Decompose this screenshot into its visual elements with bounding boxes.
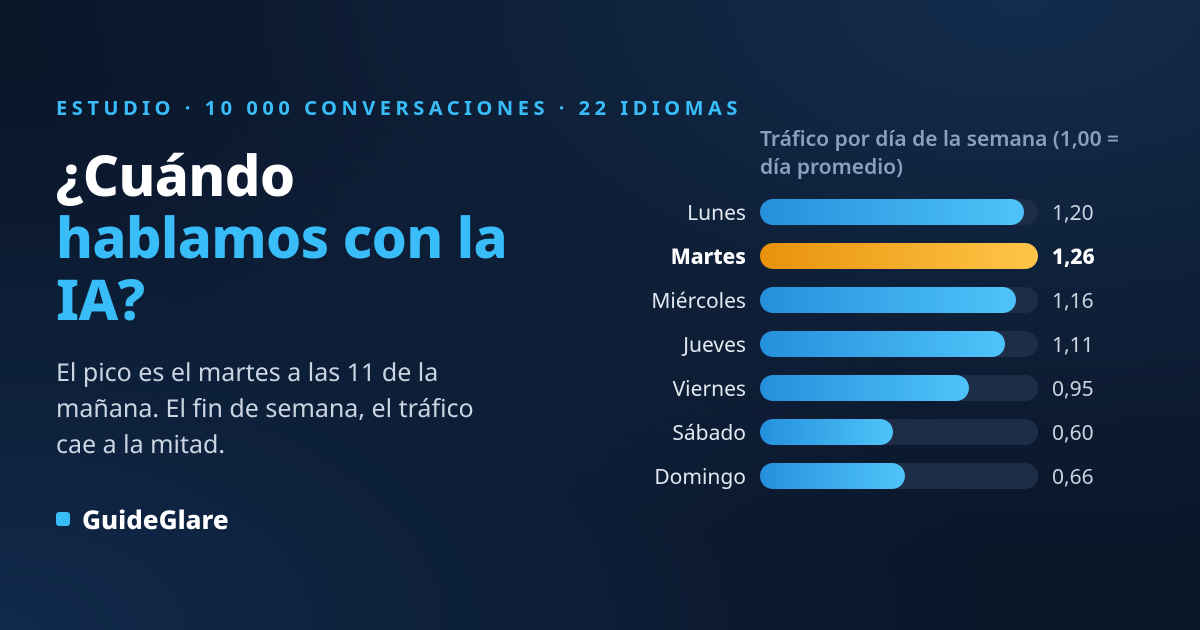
subtitle: cae a la mitad.	[56, 427, 225, 461]
row: Martes	[671, 243, 1095, 271]
chart heading: Tráfico por día de la semana (1,00 =	[760, 125, 1119, 153]
row: Lunes: 1,20	[1052, 199, 1094, 227]
row: Viernes	[672, 375, 1094, 403]
row: Lunes	[687, 199, 1094, 227]
row: Miércoles: Miércoles	[651, 287, 746, 315]
row: Viernes: 0,95	[1052, 375, 1094, 403]
row: Jueves: Jueves	[683, 331, 746, 359]
subtitle	[56, 355, 474, 461]
chart	[651, 125, 1119, 491]
title: IA?	[56, 261, 145, 337]
row: Domingo: Domingo	[654, 463, 746, 491]
row: Sábado	[672, 419, 1094, 447]
title: ¿Cuándo	[56, 137, 295, 213]
brand name: GuideGlare	[82, 501, 229, 537]
row: Jueves: 1,11	[1052, 331, 1094, 359]
row: Jueves	[682, 331, 1094, 359]
icon: brand square	[56, 512, 70, 526]
row: Martes: 1,26	[1052, 243, 1095, 271]
row: Domingo: 0,66	[1052, 463, 1094, 491]
subtitle: mañana. El fin de semana, el tráfico	[56, 391, 474, 425]
row: Viernes: Viernes	[673, 375, 746, 403]
title	[56, 137, 507, 337]
chart heading	[760, 125, 1119, 181]
chart heading: día promedio)	[760, 153, 903, 181]
row: Miércoles	[651, 287, 1094, 315]
row: Martes: Martes	[671, 243, 746, 271]
brand	[56, 501, 229, 537]
row: Sábado: Sábado	[672, 419, 746, 447]
row: Sábado: 0,60	[1052, 419, 1094, 447]
eyebrow: ESTUDIO · 10 000 CONVERSACIONES · 22 IDIOMAS	[56, 94, 742, 121]
subtitle: El pico es el martes a las 11 de la	[56, 355, 438, 389]
row: Lunes: Lunes	[687, 199, 746, 227]
title: hablamos con la	[56, 199, 507, 275]
row: Miércoles: 1,16	[1052, 287, 1094, 315]
row: Domingo	[654, 463, 1094, 491]
